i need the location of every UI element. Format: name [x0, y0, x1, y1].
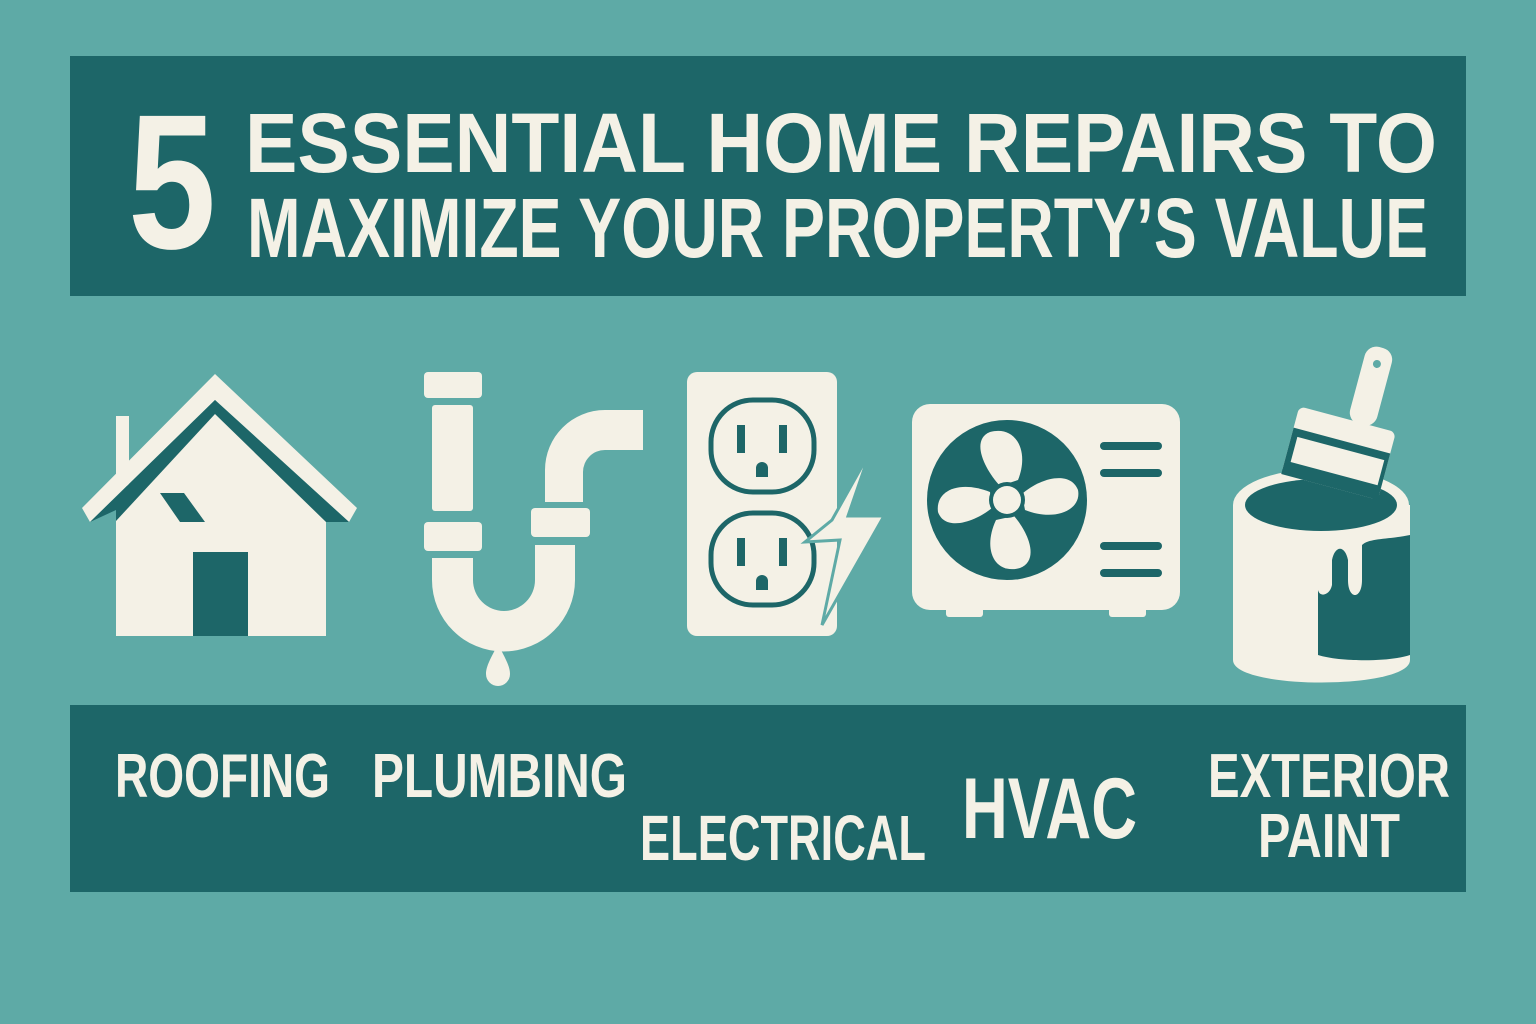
label: hvac: HVAC	[962, 761, 1137, 857]
label: exterior paint: EXTERIOR	[1208, 742, 1450, 811]
icon: house (roofing)	[82, 374, 357, 636]
label: roofing: ROOFING	[115, 742, 330, 811]
label: exterior paint	[1208, 742, 1450, 871]
title number 5: 5	[128, 74, 216, 289]
labels banner	[70, 705, 1466, 892]
icon: paint can and brush	[1233, 331, 1416, 682]
label: electrical: ELECTRICAL	[640, 802, 926, 874]
icon: electrical outlet	[687, 372, 884, 636]
icon: plumbing pipe	[424, 372, 643, 686]
label: plumbing: PLUMBING	[372, 742, 627, 811]
title banner	[70, 56, 1466, 296]
label: exterior paint: PAINT	[1258, 802, 1400, 871]
icon: HVAC unit	[912, 404, 1180, 617]
title line 1: ESSENTIAL HOME REPAIRS TO	[245, 96, 1437, 190]
